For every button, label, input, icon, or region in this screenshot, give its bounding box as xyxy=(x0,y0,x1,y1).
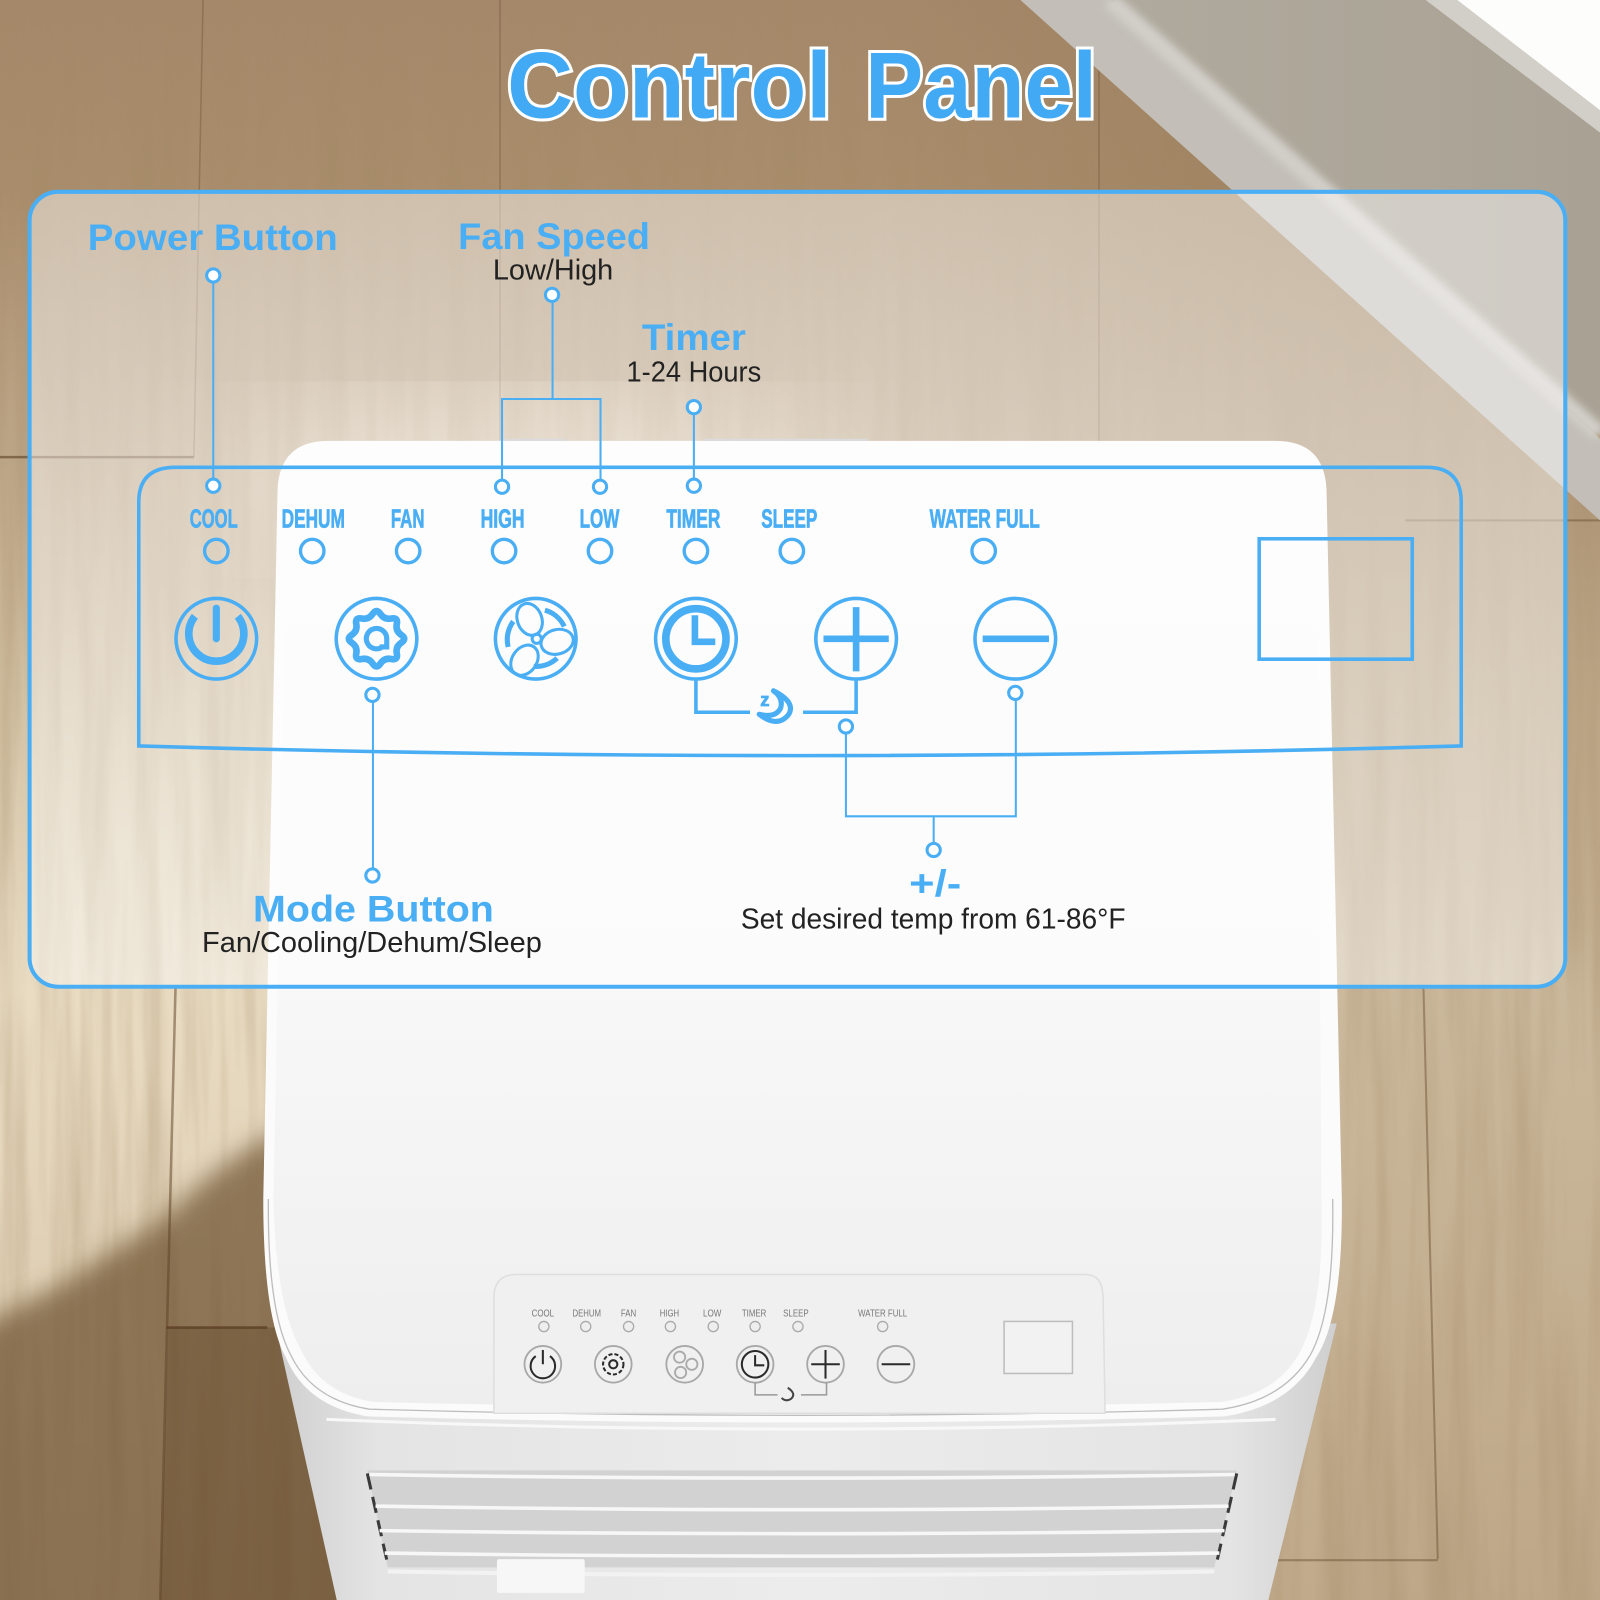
background: wall baseboard xyxy=(1020,0,1600,520)
icon: plus xyxy=(816,598,896,679)
mini indicator labels: TIMER xyxy=(742,1308,766,1319)
icon: minus xyxy=(975,598,1056,679)
indicator labels: HIGH xyxy=(481,506,524,534)
indicator labels: DEHUM xyxy=(282,506,345,534)
icon: timer clock xyxy=(656,598,736,679)
display window outline xyxy=(1259,539,1412,659)
air conditioner unit xyxy=(263,440,1342,1600)
label: plus minus temperature: +/- xyxy=(909,863,961,904)
indicator labels: FAN xyxy=(391,506,424,534)
lower body xyxy=(273,1316,1337,1600)
icon: sleep moon with connectors: z xyxy=(760,689,769,710)
indicator labels xyxy=(190,506,1040,534)
label: power button: Power Button xyxy=(88,217,338,258)
title: Control xyxy=(507,32,832,137)
grille tab xyxy=(497,1559,585,1593)
mini indicator labels: HIGH xyxy=(660,1308,679,1319)
mini indicator labels: SLEEP xyxy=(783,1308,809,1319)
mini indicator labels: LOW xyxy=(703,1308,722,1319)
translucent callout panel xyxy=(30,192,1565,987)
mini LEDs xyxy=(539,1321,888,1332)
label: power button xyxy=(88,217,338,492)
lid xyxy=(263,441,1342,1422)
label: fan speed xyxy=(458,216,650,493)
mini indicator labels xyxy=(532,1308,907,1319)
label: mode button: Mode Button xyxy=(253,888,494,929)
label: mode button xyxy=(202,688,542,959)
indicator LEDs xyxy=(205,539,995,563)
icon: fan xyxy=(495,598,576,681)
mini indicator labels: WATER FULL xyxy=(858,1308,907,1319)
label: plus minus temperature: Set desired temp from 61-86°F xyxy=(741,904,1126,936)
indicator labels: COOL xyxy=(190,506,238,534)
label: mode button: Fan/Cooling/Dehum/Sleep xyxy=(202,927,542,959)
front grille xyxy=(367,1470,1237,1575)
label: timer: Timer xyxy=(642,317,746,358)
mini indicator labels: DEHUM xyxy=(572,1308,601,1319)
label: fan speed: Fan Speed xyxy=(458,216,650,257)
title: Panel xyxy=(865,32,1097,137)
lid rim line xyxy=(268,1199,1333,1415)
indicator labels: WATER FULL xyxy=(930,506,1040,534)
indicator labels: TIMER xyxy=(666,506,720,534)
icon: power button xyxy=(176,598,257,679)
icon: mode gear xyxy=(336,598,417,679)
indicator labels: SLEEP xyxy=(761,506,817,534)
label: plus minus temperature xyxy=(741,686,1126,936)
mini indicator labels: COOL xyxy=(532,1308,554,1319)
indicator labels: LOW xyxy=(580,506,620,534)
label: timer xyxy=(627,317,761,492)
label: timer: 1-24 Hours xyxy=(627,357,761,389)
mini display window xyxy=(1004,1321,1072,1373)
label: fan speed: Low/High xyxy=(493,255,613,287)
lid face xyxy=(273,452,1322,1407)
mini buttons xyxy=(524,1346,914,1400)
title xyxy=(507,32,1097,137)
icon: sleep moon with connectors xyxy=(696,681,856,721)
physical control panel on unit xyxy=(494,1274,1105,1413)
enlarged panel outline xyxy=(139,467,1461,756)
mini indicator labels: FAN xyxy=(621,1308,636,1319)
